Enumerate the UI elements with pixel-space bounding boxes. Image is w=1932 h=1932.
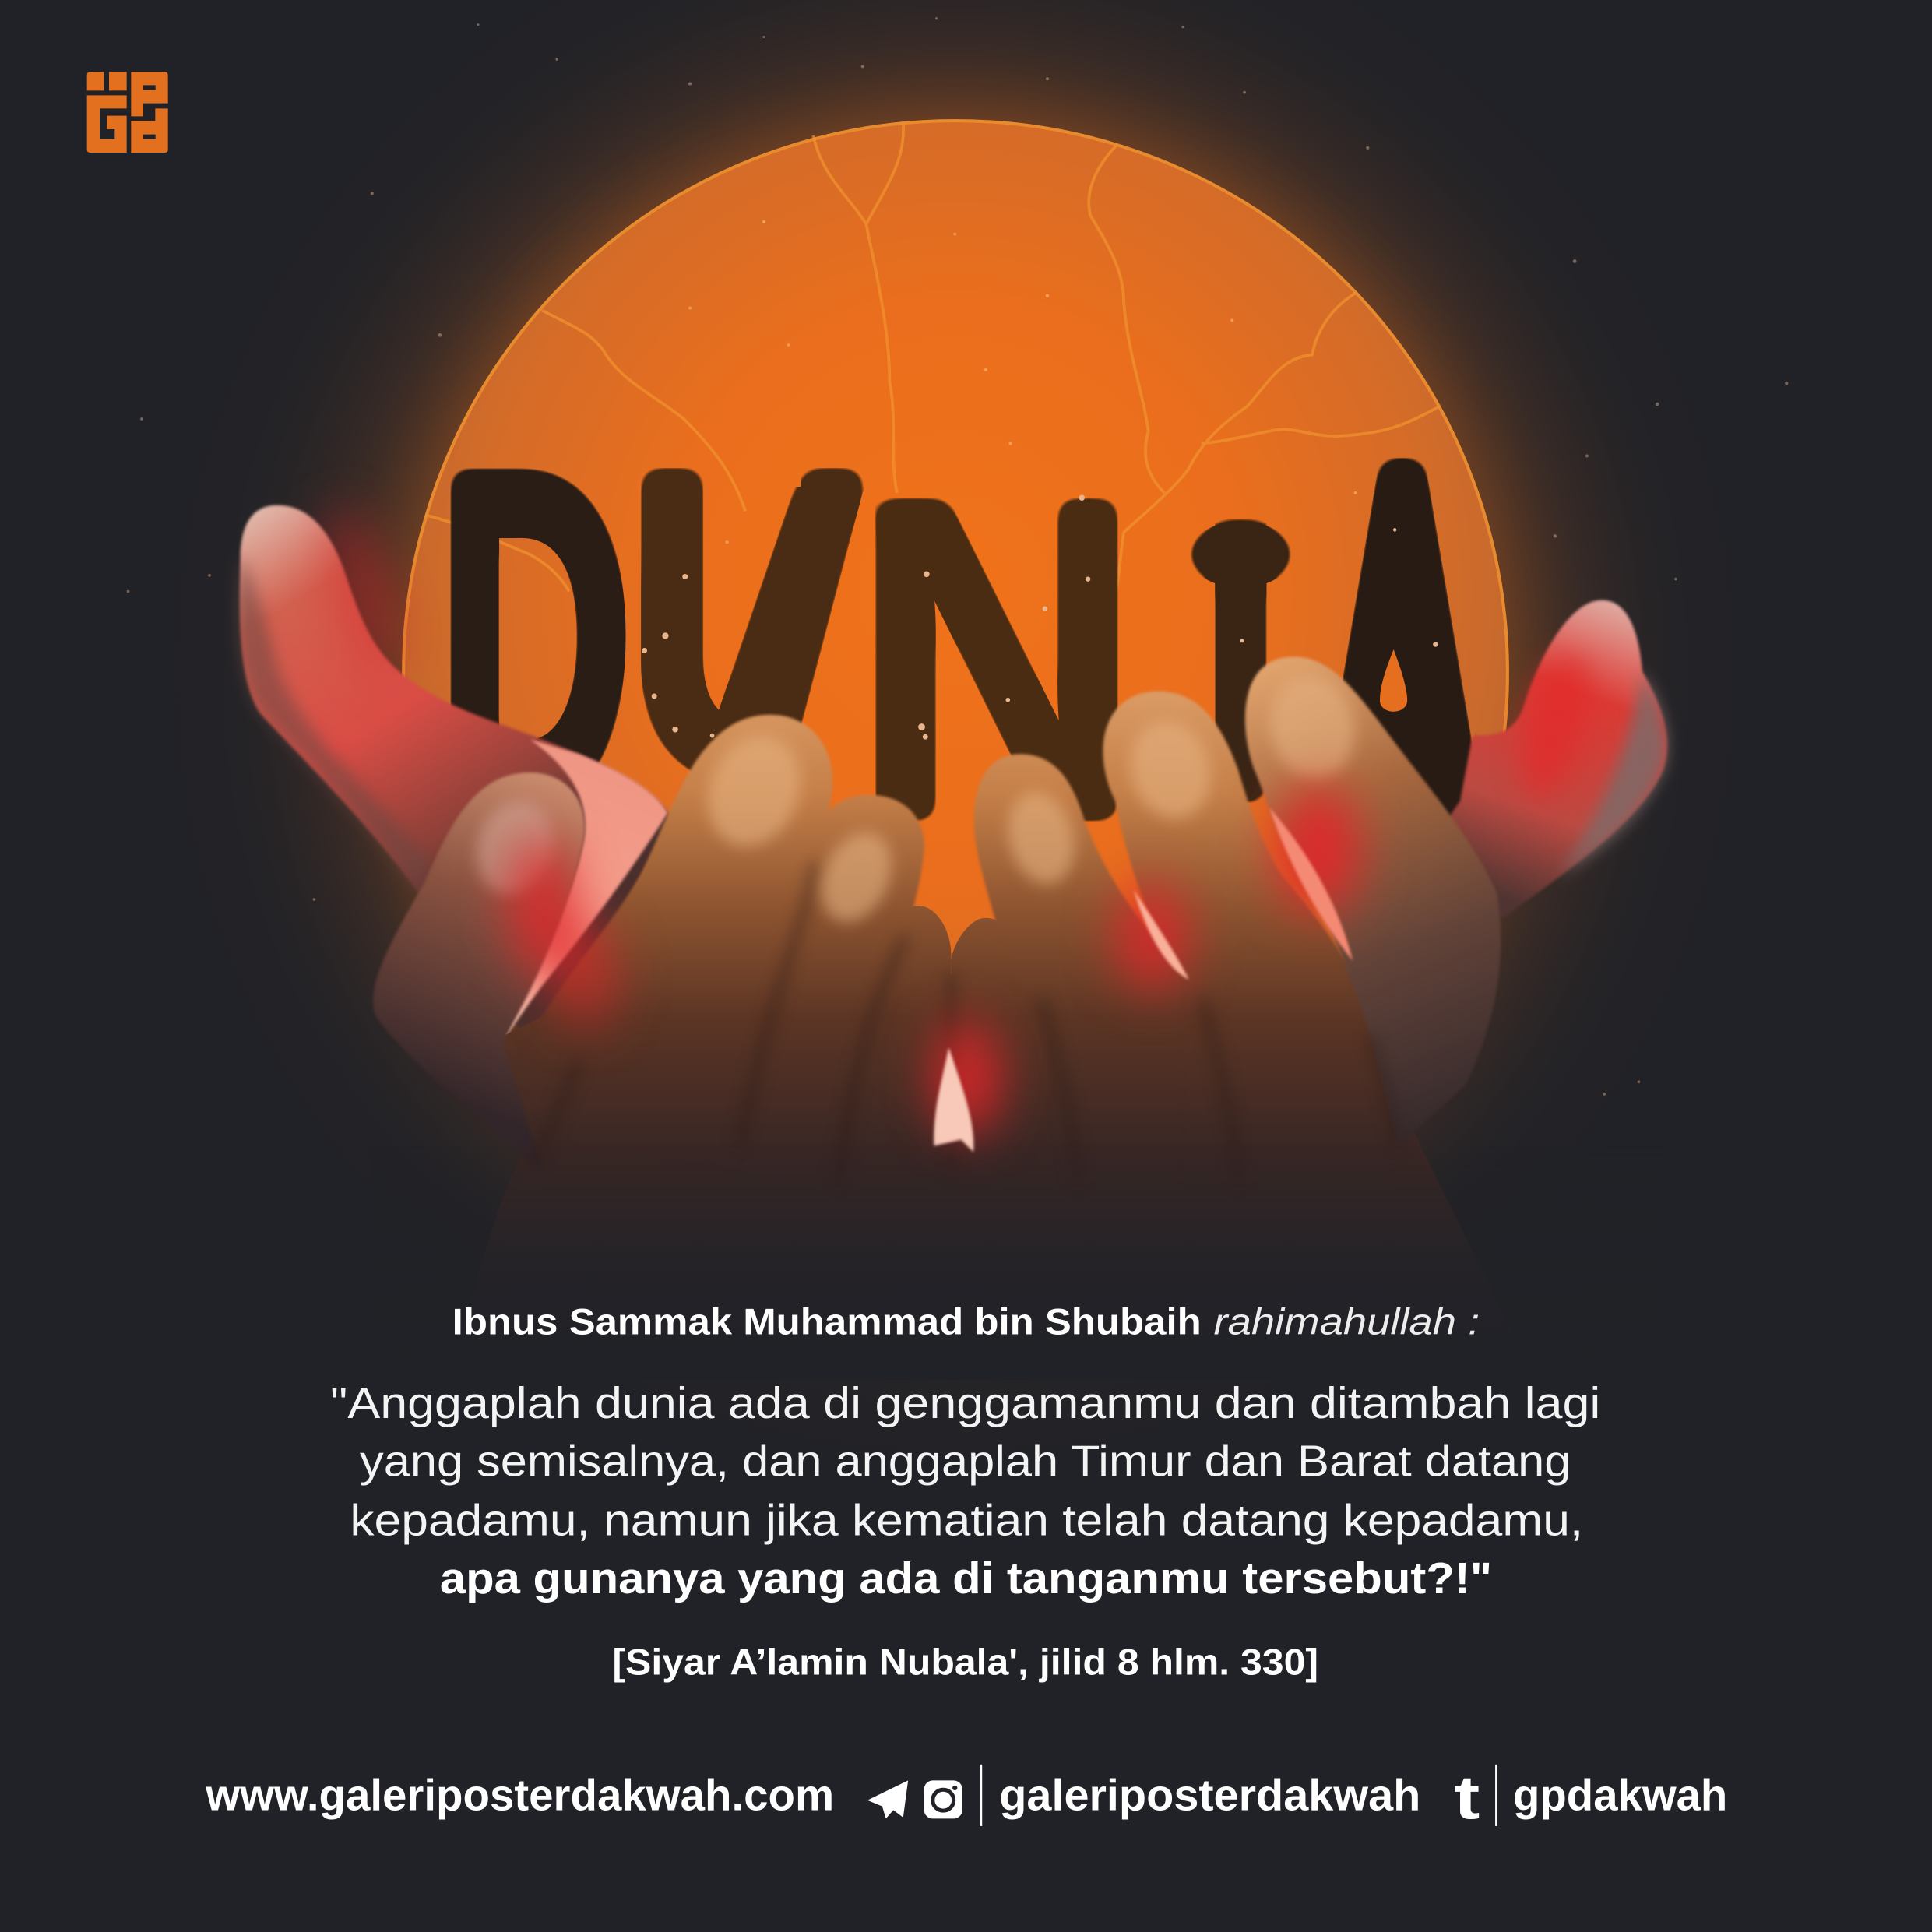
hand base [456, 973, 1528, 1367]
attribution line [452, 1302, 1480, 1343]
title: DUNIA [450, 458, 1473, 822]
footer website: www.galeriposterdakwah.com [205, 1770, 834, 1820]
shadows between fingers [530, 863, 1399, 1183]
centre right finger [952, 918, 1084, 1208]
right outer finger and wrist [1245, 656, 1501, 1146]
footer handle 2: gpdakwah [1513, 1770, 1727, 1820]
light slivers between fingers [934, 807, 1353, 1152]
attribution line: Ibnus Sammak Muhammad bin Shubaih [452, 1302, 1202, 1343]
centre left finger [813, 906, 952, 1208]
letter U [615, 468, 887, 771]
specks over letters [642, 494, 1438, 740]
left thumb outer shading [238, 554, 431, 893]
letter N: N [854, 406, 1140, 912]
right third finger [1103, 692, 1392, 1183]
background star field [127, 17, 1789, 1096]
red glows [510, 786, 1360, 1135]
icon: instagram [924, 1780, 962, 1818]
divider [1495, 1765, 1497, 1826]
finger nails [466, 667, 1364, 933]
citation: [Siyar A’lamin Nubala', jilid 8 hlm. 330] [612, 1642, 1318, 1683]
glow behind sphere [142, 0, 1768, 1486]
right thumb outer shading [1559, 671, 1667, 878]
quote: yang semisalnya, dan anggaplah Timur dan Barat datang [360, 1437, 1571, 1487]
quote [330, 1378, 1600, 1603]
letter A [1321, 362, 1483, 907]
icon: tumblr: t [1454, 1762, 1480, 1832]
logo [87, 72, 168, 153]
attribution line: rahimahullah : [1214, 1302, 1480, 1343]
left thumb and palm [238, 501, 671, 1060]
letter U: U [626, 382, 878, 867]
sphere [403, 121, 1508, 1225]
pink inner palm [503, 739, 668, 1041]
bottom fade [370, 1146, 1663, 1380]
right thumb red glow [1508, 648, 1602, 806]
cracks on sphere [425, 123, 1439, 616]
quote: kepadamu, namun jika kematian telah datang kepadamu, [350, 1496, 1583, 1546]
left little finger [373, 772, 585, 1170]
quote: apa gunanya yang ada di tanganmu tersebut?!" [440, 1554, 1492, 1603]
specks on sphere [688, 220, 1357, 544]
divider [980, 1765, 982, 1826]
quote: "Anggaplah dunia ada di genggamanmu dan ditambah lagi [330, 1378, 1600, 1428]
left second finger [518, 715, 832, 1170]
left third finger [727, 795, 924, 1183]
letter A counter [1380, 649, 1407, 712]
artwork group: A [1321, 362, 1483, 907]
left thumb red glow [311, 501, 416, 682]
hands [238, 501, 1667, 1380]
right thumb [1417, 600, 1667, 918]
letter I: I [1194, 432, 1287, 887]
icon: telegram [867, 1780, 908, 1818]
right second finger [974, 754, 1219, 1183]
footer handle: galeriposterdakwah [999, 1770, 1420, 1820]
letter D: D [438, 375, 632, 901]
